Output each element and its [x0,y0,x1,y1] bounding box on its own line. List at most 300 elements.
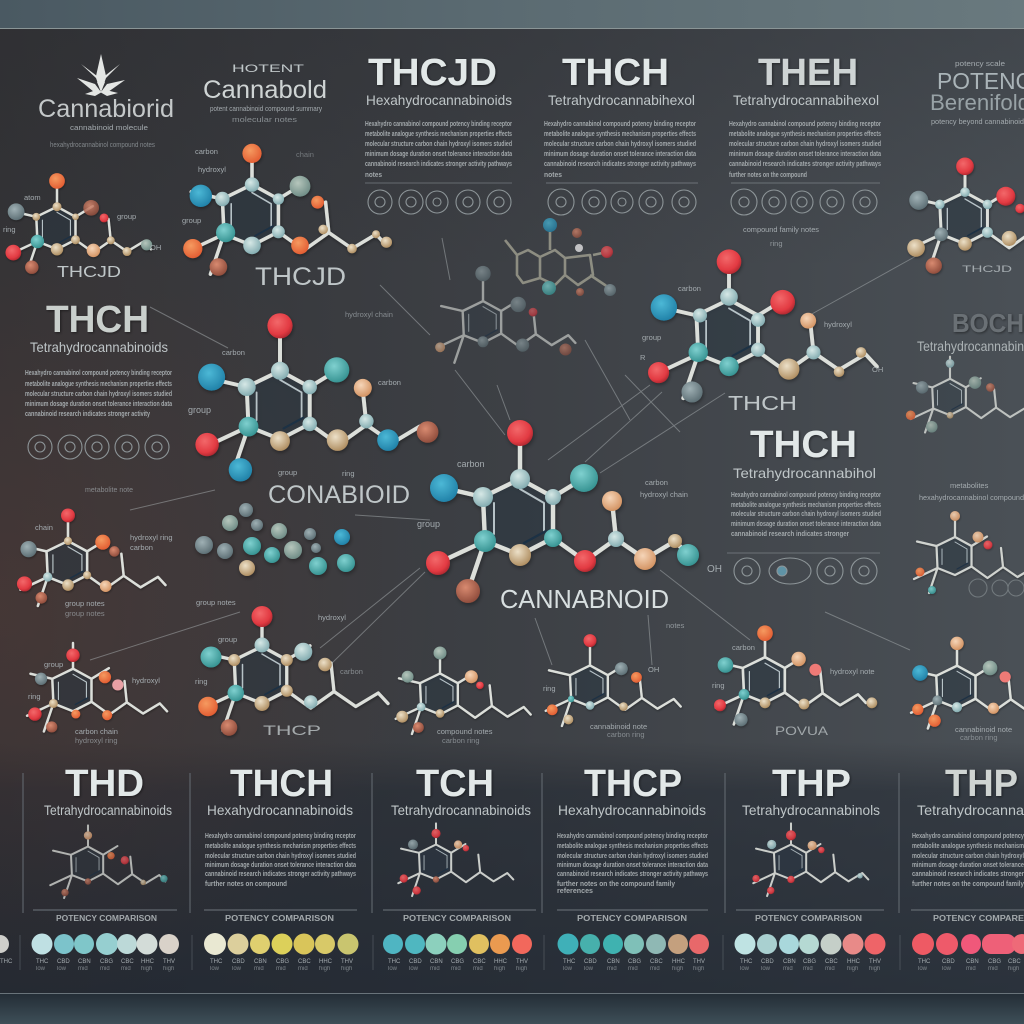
atom tags lower second: hydroxyl [318,613,346,622]
heading: THCH [46,299,149,341]
heading: THCH [230,763,333,805]
scale labels: mid [803,966,813,972]
atom tags lower right centre: hydroxyl note [830,667,875,676]
icon: cannabis leaf [77,54,125,96]
subheading: Hexahydrocannabinoids [207,802,353,818]
body text: cannabinoid research indicates stronger [731,529,849,538]
atom tags central [417,459,722,630]
scale labels [36,959,175,972]
atom tags top-left: atom [24,193,41,202]
molecule cluster: scattered atoms [195,503,355,576]
scale labels: low [942,966,952,972]
caption left lower: group notes [65,599,105,608]
body text [912,831,1024,888]
scale labels: HHC [494,959,508,965]
caption lower middle: OH [648,665,659,674]
scale labels: low [584,966,594,972]
caption left lower: chain [35,523,53,532]
body text: minimum dosage duration onset tolerance interaction data [557,860,709,869]
body text: Hexahydro cannabinol compound potency binding receptor [544,119,696,128]
caption lines: potent cannabinoid compound summary [210,104,322,113]
body text: Hexahydro cannabinol compound potency binding receptor [731,490,881,499]
label: THCJD: THCJD [255,263,346,291]
body text: minimum dosage duration onset tolerance interaction data [544,149,697,158]
atom tags lower right centre [712,643,875,690]
scale labels: mid [628,966,638,972]
scale labels: CBC [121,959,134,965]
caption lower left: group [44,660,63,669]
scale labels: mid [78,966,88,972]
scale labels: mid [825,966,835,972]
caption: metabolite note [85,485,133,494]
scale labels: low [36,966,46,972]
body text: metabolite analogue synthesis mechanism properties effects [365,129,512,138]
scale labels: CBC [473,959,486,965]
heading: THCJD [368,52,497,94]
subheading: Tetrahydrocannabinoids [30,339,168,355]
caption left lower [35,523,236,618]
panel: THCH top [544,52,698,215]
scale labels: CBG [451,959,464,965]
scale labels: low [232,966,242,972]
faded molecule [906,357,1024,433]
icon row [28,435,169,459]
atom tags second: chain [296,150,314,159]
atom tags second: group [182,216,201,225]
subheading: Tetrahydrocannabinoids [44,802,172,818]
molecule: lower middle [546,634,681,726]
icon row [731,189,877,215]
molecule: left lower (red top) [17,508,165,606]
bottom panel: THD [32,763,179,972]
body text: Hexahydro cannabinol compound potency binding receptor [365,119,512,128]
caption: POTENCY COMPARISON [403,914,511,923]
heading: THEH [758,52,858,94]
colour scale [204,933,358,955]
caption lower far right: carbon ring [960,733,998,742]
scale labels: mid [607,966,617,972]
scale labels: mid [430,966,440,972]
molecule [398,823,513,896]
caption lower left: ring [28,692,41,701]
scale labels: high [141,966,152,972]
molecule: right middle [648,249,877,403]
body text: further notes on the compound [729,170,807,179]
caption: POTENCY COMPARISON [56,914,157,923]
scale labels: CBN [254,959,267,965]
scale labels: THV [693,959,705,965]
body text: cannabinoid research indicates stronger activity pathways [557,869,708,878]
scale labels: high [672,966,683,972]
scale labels: mid [100,966,110,972]
scale labels: mid [121,966,131,972]
caption lower far right [955,725,1012,742]
atom tags central: hydroxyl chain [640,490,688,499]
scale labels: high [494,966,505,972]
atom tags right middle: group [642,333,661,342]
scale labels: low [740,966,750,972]
bottom panel: THCH [204,763,358,972]
molecule: central cannabinoid [426,420,699,603]
atom tags right middle: ring [770,239,783,248]
label right top: THCJD [962,264,1013,274]
caption lower middle: ring [543,684,556,693]
atom tags top-left [3,193,161,252]
molecule: left big [195,313,438,482]
atom tags second: carbon [195,147,218,156]
subheading: Hexahydrocannabinoids [558,802,706,818]
body text: Hexahydro cannabinol compound potency binding receptor [557,831,708,840]
label: THCH: THCH [728,393,797,415]
atom tags second [182,147,314,225]
scale labels: CBD [761,959,774,965]
panel: THCH right middle [727,424,882,584]
panel: THCJD [365,52,513,214]
atom tags lower second: ring [195,677,208,686]
body text [365,119,513,179]
body text: minimum dosage duration onset tolerance interaction data [25,399,173,408]
scale labels: CBN [78,959,91,965]
right-edge block: faded heading and molecule [906,308,1024,597]
caption lines [50,123,155,149]
subheading: Tetrahydrocannabinols [742,802,880,818]
scale labels: mid [650,966,660,972]
scale labels: low [761,966,771,972]
scale labels: high [341,966,352,972]
colour scale [912,933,1024,955]
scale labels: high [319,966,330,972]
body text: further notes on the compound family [557,879,676,888]
scale labels: high [1008,966,1019,972]
caption lines: metabolites [950,481,989,490]
scale labels: THC [388,959,401,965]
title: Cannabold: Cannabold [203,76,327,104]
caption lower far right: cannabinoid note [955,725,1012,734]
bottom panel dividers [20,773,900,970]
header block: Potency Berenifo [930,59,1024,126]
scale labels: low [57,966,67,972]
molecule: lower far right [911,637,1024,728]
body text: Hexahydro cannabinol compound potency binding receptor [205,831,356,840]
scale labels: mid [783,966,793,972]
scale labels: THV [341,959,353,965]
leader lines [90,238,918,665]
atom tags top-left: ring [3,225,16,234]
atom tags left big: carbon [222,348,245,357]
atom tags left big: group [188,405,211,415]
caption lines [210,104,322,124]
scale labels: THV [516,959,528,965]
body text: references [557,886,593,895]
scale labels: high [847,966,858,972]
body text [729,119,882,179]
molecule [50,825,168,898]
subheading: Tetrahydrocannabinoids [391,802,531,818]
caption lines: hexahydrocannabinol compound notes [50,140,155,149]
caption lower mid-left: carbon ring [442,736,480,745]
caption: POTENCY COMPARISON [225,914,334,923]
scale labels: mid [988,966,998,972]
molecule: top-left small [5,173,152,274]
body text: Hexahydro cannabinol compound potency binding receptor [729,119,881,128]
body text [557,831,709,895]
atom tags left big: hydroxyl chain [345,310,393,319]
scale labels: CBG [100,959,113,965]
body text: metabolite analogue synthesis mechanism properties effects [205,841,356,850]
body text: metabolite analogue synthesis mechanism properties effects [557,841,708,850]
body text: notes [544,170,562,179]
scale labels: CBD [57,959,70,965]
atom tags left big: group [278,468,297,477]
label: THCJD small: THCJD [57,264,121,281]
scale labels: HHC [847,959,861,965]
scale labels: mid [254,966,264,972]
molecule: faded upper middle lower ring [435,266,575,363]
scale labels: CBD [942,959,955,965]
scale labels: high [869,966,880,972]
scale labels: low [563,966,573,972]
body text [544,119,697,179]
scale labels: CBG [988,959,1001,965]
atom tags top-left: group [117,212,136,221]
body text: minimum dosage duration onset tolerance interaction data [205,860,357,869]
scale labels [740,959,881,972]
atom tags central: carbon [645,478,668,487]
molecule [752,823,868,896]
body text: metabolite analogue synthesis mechanism properties effects [729,129,881,138]
header block: Cannabinoid logo [38,54,174,149]
scale labels: THC [36,959,49,965]
bottom panel: THP right [911,763,1024,972]
label: POVUA: POVUA [775,724,828,738]
scale labels: mid [966,966,976,972]
scale labels: CBG [803,959,816,965]
body text: cannabinoid research indicates stronger activity pathways [205,869,356,878]
body text: molecular structure carbon chain hydroxyl isomers studied [557,851,708,860]
colour scale [32,933,179,955]
overline: HOTENT: HOTENT [232,63,304,75]
bottom background band [0,993,1024,1024]
top background band [0,0,1024,29]
body text: notes [365,170,382,179]
panel: THCH left [25,299,173,494]
scale labels: CBD [584,959,597,965]
subheading: Tetrahydrocannabihol [733,465,876,481]
caption lower middle [543,665,659,739]
atom tags left big: ring [342,469,355,478]
body text: Hexahydro cannabinol compound potency binding receptor [25,368,172,377]
caption: POTENCY COMPARE [933,914,1024,923]
caption lower left: hydroxyl [132,676,160,685]
caption lines: cannabinoid molecule [70,123,148,132]
caption lines: molecular notes [232,115,297,124]
scale labels [563,959,705,972]
scale labels: CBG [628,959,641,965]
scale labels: THC [210,959,223,965]
body text: minimum dosage duration onset tolerance interaction data [731,519,882,528]
atom tags right middle: OH [872,365,883,374]
atom tags right middle: carbon [678,284,701,293]
body text: molecular structure carbon chain hydroxyl isomers studied [205,851,356,860]
atom tags lower second [195,613,363,686]
atom tags central: OH [707,564,722,575]
bottom panel: TCH [383,763,536,972]
atom tags central: notes [666,621,685,630]
body text [205,831,357,888]
body text: metabolite analogue synthesis mechanism properties effects [544,129,696,138]
panel: THEH [729,52,882,234]
scale labels: THC [563,959,576,965]
caption lower mid-left: compound notes [437,727,493,736]
caption lower left [28,660,160,745]
atom tags lower right centre: carbon [732,643,755,652]
body text: cannabinoid research indicates stronger activity pathways [729,159,881,168]
body text [25,368,173,418]
scale labels: mid [276,966,286,972]
caption left lower: carbon [130,543,153,552]
atom tags top-left: OH [150,243,161,252]
scale labels: mid [473,966,483,972]
scale labels: CBN [430,959,443,965]
caption left lower: hydroxyl ring [130,533,173,542]
scale labels: CBG [276,959,289,965]
scale labels: mid [298,966,308,972]
heading: THP [945,763,1018,805]
atom tags left big [188,310,401,478]
bottom panel: THP [734,763,886,972]
scale labels [210,959,353,972]
label: CONABIOID: CONABIOID [268,481,410,509]
body text: cannabinoid research indicates stronger activity pathways [365,159,512,168]
caption: compound family notes [743,225,819,234]
title: Cannabiorid: Cannabiorid [38,95,174,123]
scale labels: low [210,966,220,972]
scale labels: THC [740,959,753,965]
atom tags right middle [640,239,883,374]
atom tags central: group [417,519,440,529]
caption left lower: group notes [65,609,105,618]
body text [731,490,882,538]
overline: potency scale [955,59,1005,68]
molecule: lower right centre [714,625,877,726]
label: THCP: THCP [263,722,321,738]
scale labels: CBC [1008,959,1021,965]
left-edge partial scale dot [0,935,13,965]
icon row [734,558,877,584]
atom tags left big: carbon [378,378,401,387]
subheading: Tetrahydrocannabihexol [548,92,695,108]
subheading: Tetrahydrocanna [917,802,1024,818]
scale labels [918,959,1021,972]
body text: cannabinoid research indicates stronger activity [25,409,151,418]
scale labels: CBN [966,959,979,965]
icon row [548,189,696,215]
body text: molecular structure carbon chain hydroxyl isomers studied [731,509,881,518]
subheading: Tetrahydrocannabihexol [733,92,879,108]
scale labels: THV [869,959,881,965]
heading: THCH [562,52,669,94]
molecule: top right [907,157,1024,274]
scale labels: THC [918,959,931,965]
atom tags lower second: group [218,635,237,644]
colour scale [383,934,532,954]
colour scale [734,934,886,954]
body text: metabolite analogue synthesis mechanism properties effects [25,379,172,388]
scale labels: low [918,966,928,972]
atom tags central: carbon [457,459,485,469]
scale labels: CBD [232,959,245,965]
atom tags lower right centre: ring [712,681,725,690]
scale labels: HHC [141,959,155,965]
scale labels [388,959,528,972]
scale labels: low [409,966,419,972]
atom tags lower second: carbon [340,667,363,676]
molecule: lower middle left [396,646,531,734]
atom tags right middle: R [640,353,646,362]
body text: minimum dosage duration onset tolerance interaction data [365,149,513,158]
heading: THCP [584,763,682,805]
small icons [969,579,1024,597]
scale labels: mid [451,966,461,972]
molecule: faded upper middle upper chain [505,218,616,296]
body text: metabolite analogue synthesis mechanism properties effects [731,500,881,509]
caption lower left: hydroxyl ring [75,736,118,745]
heading: THD [65,763,144,805]
body text: molecular structure carbon chain hydroxyl isomers studied [25,389,172,398]
subheading: Hexahydrocannabinoids [366,92,512,108]
molecule: lower left [27,643,167,733]
scale labels: HHC [319,959,333,965]
molecule right lower [914,511,1024,594]
body text: cannabinoid research indicates stronger activity pathways [544,159,696,168]
caption: potency beyond cannabinoid [931,117,1024,126]
scale labels: CBC [298,959,311,965]
caption left lower: group notes [196,598,236,607]
colour scale [558,934,709,954]
scale labels: CBN [783,959,796,965]
caption lower mid-left [437,727,493,745]
header block: Potent Cannabold [203,63,327,124]
icon row [368,190,511,214]
body text: further notes on compound [205,879,287,888]
scale labels: CBD [409,959,422,965]
caption lines [919,481,1024,502]
scale labels: low [388,966,398,972]
scale labels: CBC [825,959,838,965]
scale labels: high [693,966,704,972]
scale labels: HHC [672,959,686,965]
scale labels: high [516,966,527,972]
atom tags right middle: hydroxyl [824,320,852,329]
body text: molecular structure carbon chain hydroxyl isomers studied [729,139,881,148]
label: CANNABNOID: CANNABNOID [500,584,669,614]
molecule: top second [183,144,392,276]
heading: THP [772,763,851,805]
scale labels: CBN [607,959,620,965]
caption: POTENCY COMPARISON [577,914,687,923]
bottom panel: THCP [557,763,709,972]
scale labels: CBC [650,959,663,965]
body text: molecular structure carbon chain hydroxyl isomers studied [544,139,696,148]
heading: TCH [416,763,494,805]
caption lower middle: carbon ring [607,730,645,739]
body text: molecular structure carbon chain hydroxyl isomers studied [365,139,512,148]
atom tags second: hydroxyl [198,165,226,174]
caption: POTENCY COMPARISON [755,914,862,923]
caption lower middle: cannabinoid note [590,722,647,731]
scale labels: high [163,966,174,972]
molecule: lower second [198,606,388,736]
